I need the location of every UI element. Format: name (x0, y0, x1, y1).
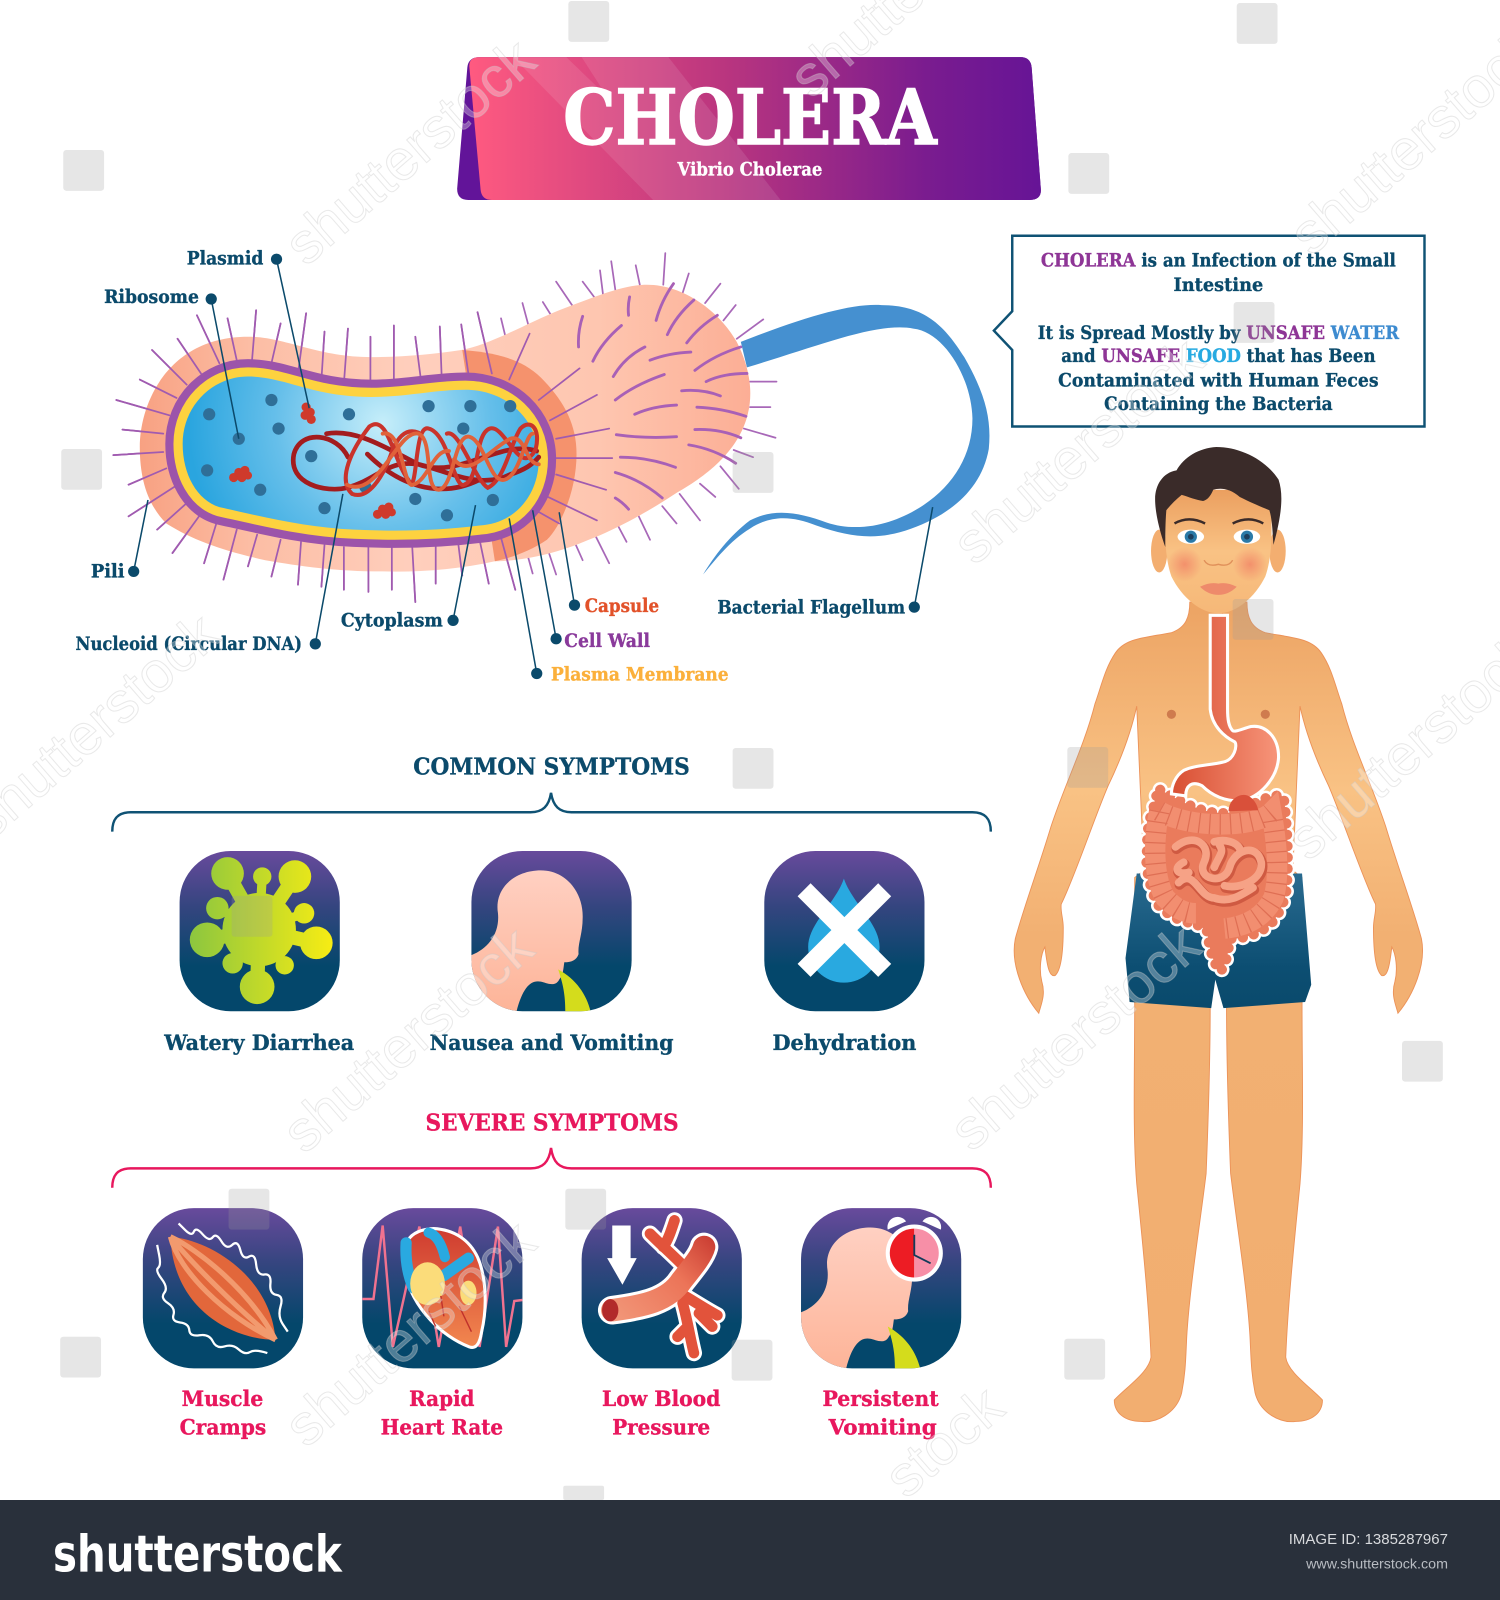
shorts (1126, 873, 1311, 1008)
watermark overlay: shutterstock (273, 27, 547, 277)
label: Bacterial Flagellum: Bacterial Flagellum (717, 597, 905, 618)
ears (1151, 530, 1286, 572)
website: www.shutterstock.com (1305, 1556, 1448, 1572)
watermark overlay: shutterstock (271, 914, 545, 1165)
label: Cytoplasm: Cytoplasm (341, 611, 443, 632)
label: Nucleoid: Nucleoid (Circular DNA) (76, 634, 302, 655)
face (1165, 490, 1272, 613)
label: Dehydration: Dehydration (772, 1031, 917, 1056)
watermark overlay: shutterstock (938, 912, 1213, 1163)
title banner (457, 57, 1041, 200)
watermark overlay: shutterstock (273, 1208, 547, 1459)
common symptoms heading: COMMON SYMPTOMS (413, 752, 690, 780)
callout text line 4: and UNSAFE FOOD that has Been (1061, 345, 1376, 367)
colon bumps (1146, 790, 1288, 971)
watermark overlay: stock (873, 1374, 1016, 1510)
alarm clock (886, 1217, 943, 1282)
plasmids (229, 403, 396, 519)
body pili (578, 284, 747, 509)
hair (1155, 447, 1281, 547)
eyes (1178, 530, 1260, 544)
torso fill (1148, 638, 1289, 878)
label: Muscle Cramps: Muscle (182, 1387, 263, 1412)
callout text line 6: Containing the Bacteria (1104, 393, 1333, 415)
icon: persistent vomiting (801, 1208, 961, 1369)
callout text line 3: It is Spread Mostly by UNSAFE WATER (1038, 322, 1399, 344)
label: Persistent Vomiting: Vomiting (828, 1416, 937, 1441)
label: Muscle Cramps (180, 1387, 266, 1441)
common symptoms bracket (112, 793, 991, 832)
callout text line 5: Contaminated with Human Feces (1058, 370, 1379, 392)
label: Low Blood Pressure: Low Blood (602, 1387, 720, 1412)
label: Rapid Heart Rate: Heart Rate (381, 1416, 503, 1441)
nucleoid DNA (293, 424, 539, 495)
icon: rapid heart rate (362, 1208, 522, 1368)
label: Plasmid: Plasmid (187, 248, 263, 269)
capsule (140, 285, 750, 572)
label: Persistent Vomiting (822, 1387, 939, 1441)
subtitle text: Vibrio Cholerae (677, 159, 822, 181)
icon: low blood pressure (582, 1208, 742, 1368)
leader lines (134, 259, 933, 673)
flagellum (703, 305, 989, 574)
pili behind capsule (113, 253, 777, 602)
watermark overlay: shutterstock (941, 326, 1216, 576)
icon: nausea and vomiting (471, 851, 632, 1012)
pancreas bump (1229, 795, 1258, 811)
label: Plasma Membrane: Plasma Membrane (551, 665, 729, 686)
label: Capsule: Capsule (585, 596, 659, 617)
icon: watery diarrhea (180, 851, 340, 1011)
callout box (994, 236, 1424, 427)
eyebrows (1174, 519, 1263, 523)
cytoplasm (183, 377, 539, 531)
image id: IMAGE ID: 1385287967 (1289, 1532, 1448, 1548)
label dots (128, 254, 920, 679)
label: Nausea and Vomiting: Nausea and Vomiting (430, 1031, 673, 1056)
label: Persistent Vomiting: Persistent (822, 1387, 939, 1412)
label: Ribosome: Ribosome (104, 287, 199, 308)
footer logo: shutterstock (53, 1525, 343, 1584)
body skin right half (1214, 602, 1423, 1422)
colon (1155, 811, 1277, 929)
title text: CHOLERA (563, 73, 938, 162)
mouth (1200, 583, 1237, 595)
label: Low Blood Pressure (602, 1387, 720, 1441)
label: Rapid Heart Rate: Rapid (409, 1387, 475, 1412)
stomach and esophagus (1171, 615, 1279, 801)
label: Watery Diarrhea: Watery Diarrhea (163, 1031, 354, 1056)
label: Muscle Cramps: Cramps (180, 1416, 266, 1441)
small intestine (1177, 842, 1262, 902)
icon: muscle cramps (143, 1208, 303, 1368)
icon: dehydration (764, 851, 924, 1011)
bacterium diagram (76, 248, 989, 686)
ribosomes (201, 394, 516, 521)
label: Rapid Heart Rate (381, 1387, 503, 1441)
callout text line 1: CHOLERA is an Infection of the Small (1041, 249, 1396, 271)
label: Cell Wall: Cell Wall (564, 631, 650, 652)
intestine mass (1146, 790, 1288, 971)
pili over capsule (113, 310, 612, 602)
nipples (1167, 710, 1270, 719)
capsule cut band (462, 350, 577, 561)
cheeks (1167, 547, 1267, 582)
severe symptoms heading: SEVERE SYMPTOMS (426, 1109, 679, 1137)
intestines (1146, 790, 1288, 971)
label: Pili: Pili (91, 562, 125, 583)
severe symptoms bracket (112, 1148, 991, 1188)
body skin left half (1014, 602, 1222, 1422)
human figure (1014, 447, 1423, 1422)
plasma membrane (183, 377, 539, 531)
nose (1204, 560, 1233, 565)
cell wall (183, 377, 539, 531)
callout text line 2: Intestine (1173, 274, 1263, 296)
label: Low Blood Pressure: Pressure (612, 1416, 710, 1441)
footer bar (0, 1500, 1500, 1600)
